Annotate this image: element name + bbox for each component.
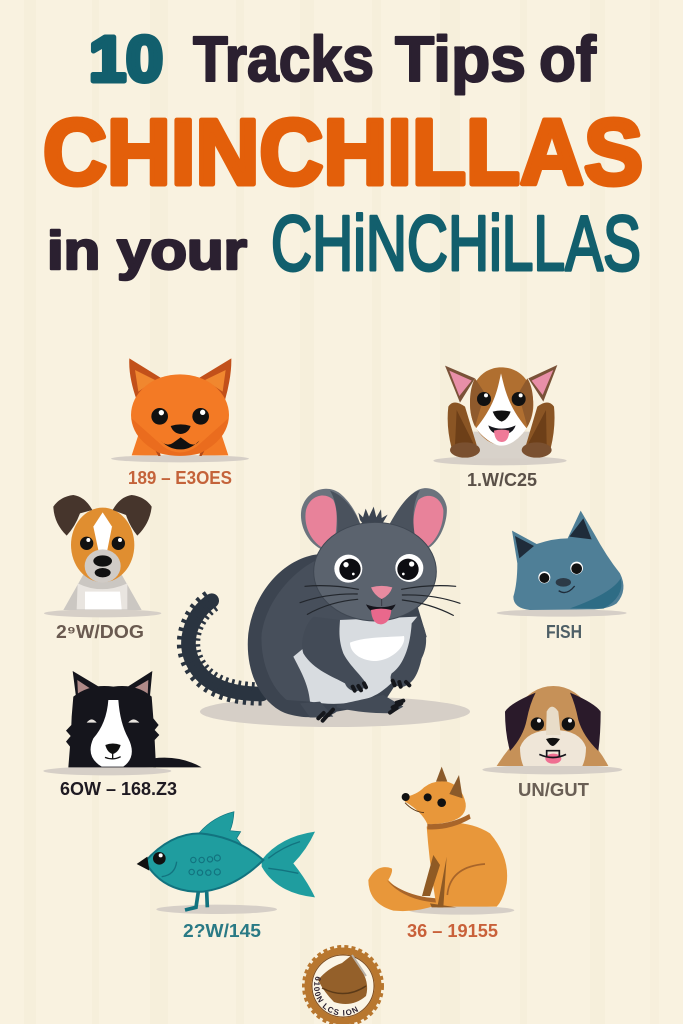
badge seal	[302, 945, 384, 1024]
chinchilla whiskers	[300, 586, 460, 615]
title line 1: Tracks	[193, 23, 374, 95]
label: FISH	[546, 622, 582, 642]
panel: blue-grey cat	[497, 511, 627, 642]
title line 1: 10	[89, 23, 163, 95]
label: 189 – E3OES	[128, 468, 232, 488]
icon: orange cat	[111, 358, 249, 462]
icon: brown dog	[433, 365, 567, 465]
chinchilla body	[248, 554, 427, 717]
chinchilla head	[314, 522, 436, 621]
chinchilla claws	[318, 681, 409, 721]
chinchilla ears	[301, 488, 447, 552]
title	[43, 23, 643, 287]
chinchilla arms and feet	[300, 617, 426, 717]
label: 2?W/145	[183, 921, 261, 941]
panel: black and white dog	[43, 671, 202, 799]
panel: orange cat	[111, 358, 249, 488]
panel: teal fish	[137, 812, 315, 941]
icon: teal fish	[137, 812, 315, 914]
label: 2⁹W/DOG	[56, 622, 144, 642]
chinchilla eyes	[334, 554, 423, 583]
panel: terrier dog	[44, 495, 161, 642]
panel: sitting orange dog	[368, 767, 514, 941]
label: 6OW – 168.Z3	[60, 779, 177, 799]
icon: black dog	[43, 671, 202, 775]
panel: beagle dog	[482, 686, 622, 800]
label: 36 – 19155	[407, 921, 498, 941]
icon: blue cat	[497, 511, 627, 617]
icon: sitting dog	[368, 767, 514, 915]
fish scales	[189, 855, 220, 875]
icon: badge chinchilla	[318, 955, 367, 1004]
badge text: 6100N LCS ION	[314, 976, 358, 1016]
title line 1: of	[539, 23, 597, 95]
icon: terrier dog	[44, 495, 161, 617]
title line 3: in your: in your	[47, 221, 247, 281]
label: 1.W/C25	[467, 470, 537, 490]
panel: brown and white dog	[433, 365, 567, 490]
chinchilla nose and mouth	[366, 586, 396, 624]
title line 1	[89, 23, 597, 95]
icon: beagle	[482, 686, 622, 774]
central chinchilla illustration	[189, 488, 470, 727]
chinchilla belly	[293, 617, 418, 704]
label: UN/GUT	[518, 780, 589, 800]
title line 1: Tips	[395, 23, 526, 95]
title line 2: CHINCHILLAS: CHINCHILLAS	[43, 100, 643, 204]
chinchilla tail	[189, 601, 262, 694]
